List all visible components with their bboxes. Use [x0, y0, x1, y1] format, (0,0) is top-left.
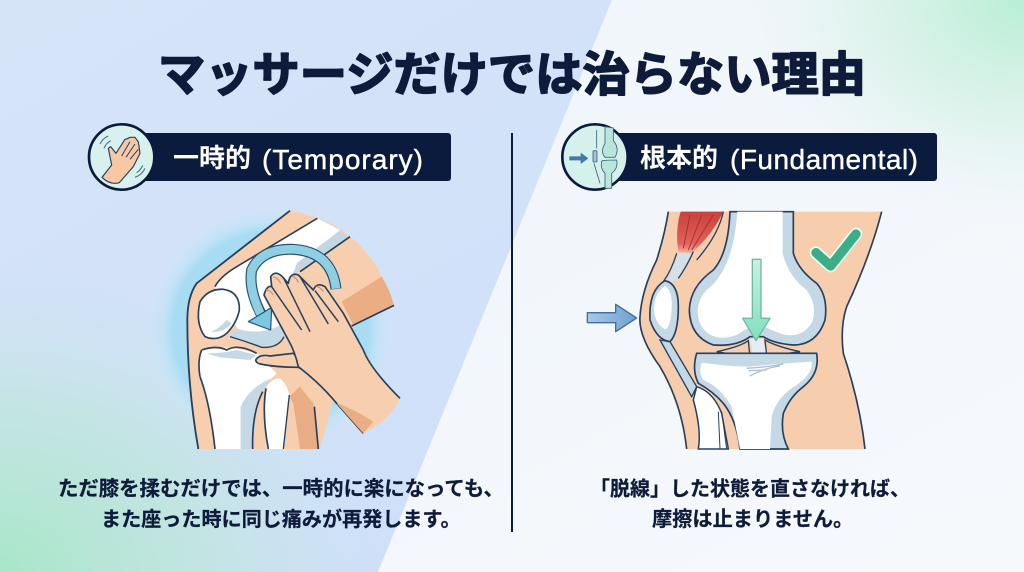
text: fundamental explanation: 「脱線」した状態を直さなければ、: [590, 478, 910, 500]
title: マッサージだけでは治らない理由: [158, 49, 866, 102]
illustration: massaging the knee: [146, 205, 400, 455]
icon: knee alignment: [562, 124, 628, 190]
hand: [264, 273, 400, 433]
femur: [215, 218, 340, 333]
tibia: [695, 353, 817, 449]
heading bar: temporary: (Temporary): [262, 144, 423, 175]
leg skin: [187, 211, 394, 449]
panel: fundamental (right): [562, 124, 937, 531]
arrow: patella push: [587, 304, 637, 332]
text: fundamental explanation: 摩擦は止まりません。: [652, 508, 853, 531]
finger lines: [272, 277, 338, 332]
text: fundamental explanation: [590, 478, 910, 531]
cartilage band: [228, 323, 284, 347]
text: temporary explanation: また座った時に同じ痛みが再発します。: [101, 507, 461, 531]
heading bar: temporary: [140, 133, 451, 181]
blue halo: [146, 205, 396, 455]
thigh darker muscle: [342, 277, 394, 325]
heading bar: temporary: 一時的: [173, 143, 251, 173]
ligament: [750, 338, 767, 360]
icon: check mark: [816, 234, 856, 266]
icon: massaging hand: [89, 124, 154, 190]
center divider: [511, 133, 513, 532]
heading bar: fundamental: (Fundamental): [730, 144, 918, 175]
fibula: [289, 387, 318, 449]
text: temporary explanation: [58, 478, 504, 531]
thumb: [256, 353, 313, 375]
tibia: [199, 348, 277, 449]
illustration: knee cross-section: [587, 212, 882, 449]
circular arrow: [248, 249, 336, 330]
femur: [689, 212, 826, 345]
heading bar: fundamental: [610, 133, 937, 181]
arrow: joint compression: [743, 259, 770, 341]
leg skin: [640, 212, 882, 449]
tendon band: [665, 253, 692, 283]
panel: temporary (left): [58, 124, 504, 531]
skin outlines: [187, 211, 290, 449]
muscle: [677, 212, 723, 253]
meniscus wedges: [717, 341, 750, 357]
patellar tendon: [660, 340, 697, 397]
text: temporary explanation: ただ膝を揉むだけでは、一時的に楽になっても、: [58, 478, 504, 500]
patella: [650, 281, 678, 342]
fibula: [693, 387, 728, 449]
patella: [198, 289, 239, 339]
heading bar: fundamental: 根本的: [640, 143, 718, 173]
upper tendon lines: [663, 252, 693, 282]
